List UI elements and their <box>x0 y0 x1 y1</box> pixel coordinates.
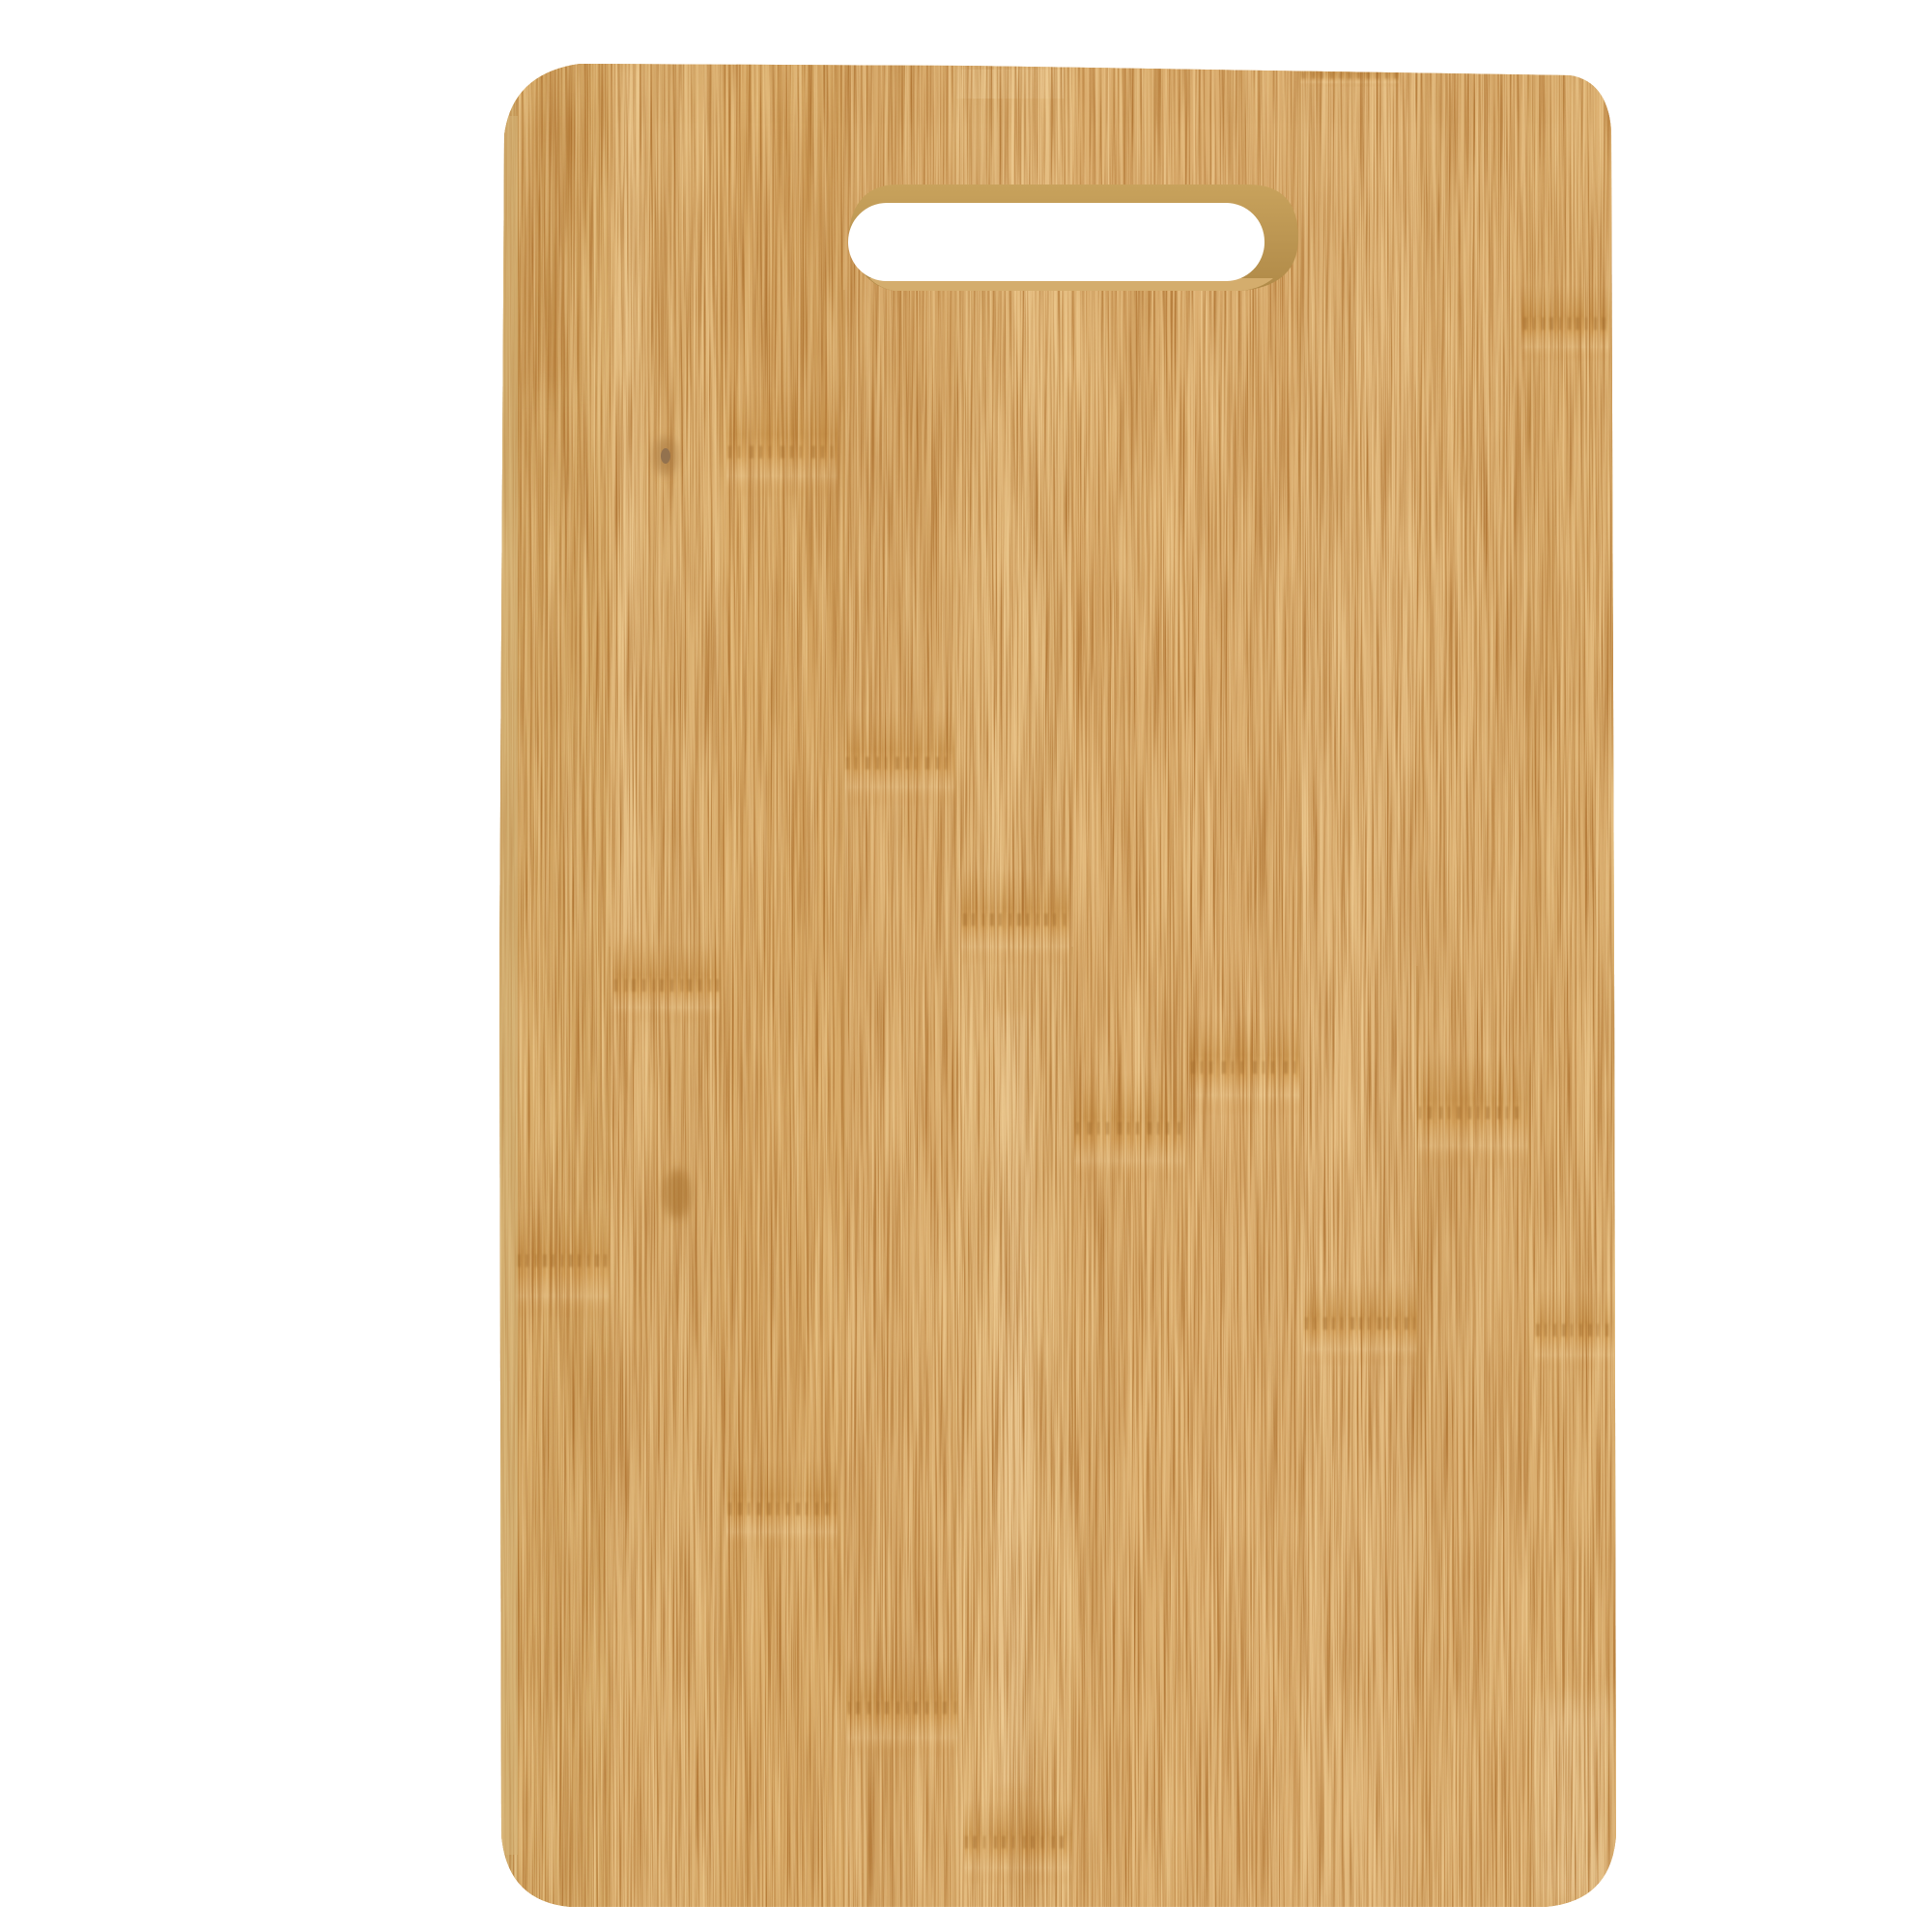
knot: upper <box>654 437 677 475</box>
strip seams <box>518 58 1528 1913</box>
grain light <box>499 58 1620 1913</box>
grain dark <box>499 58 1620 1913</box>
node dots <box>517 75 1612 1842</box>
handle bevel lower lip <box>869 278 1273 291</box>
light streak left <box>620 70 641 935</box>
light streak centre <box>995 1014 1034 1787</box>
left edge sliver <box>499 116 518 1855</box>
cutting board <box>499 58 1620 1913</box>
darker patch upper left <box>518 117 579 384</box>
handle opening <box>848 203 1264 281</box>
light streak lower right <box>1536 1700 1613 1903</box>
node bands <box>515 64 1614 1886</box>
handle cut-out <box>848 185 1298 291</box>
knot: lower <box>664 1169 691 1219</box>
bamboo strips <box>499 58 1620 1913</box>
board edge <box>499 64 1616 1907</box>
darker patch upper strip <box>724 126 831 415</box>
handle bevel <box>848 185 1298 291</box>
broad wood tone <box>499 58 1620 1913</box>
